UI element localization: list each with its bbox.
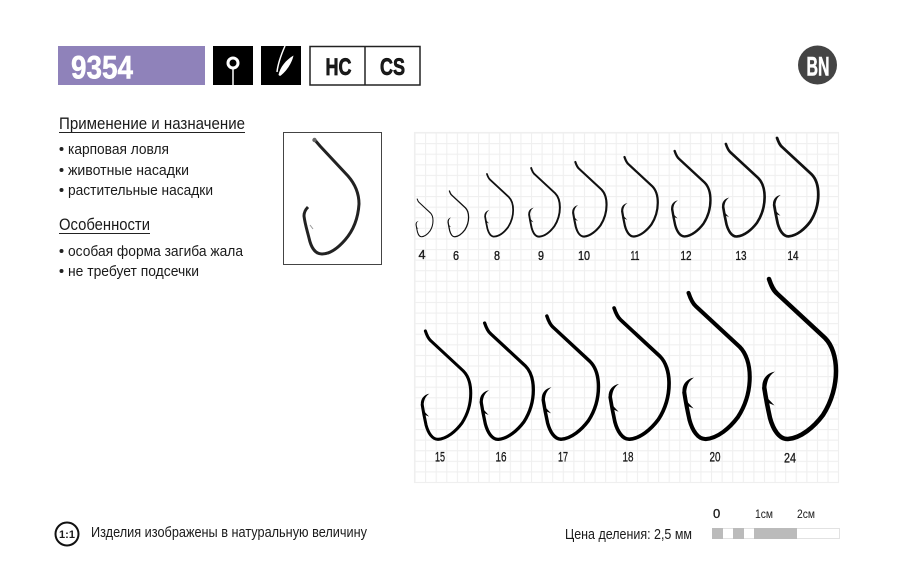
- size labels: row one: 10: [578, 249, 590, 263]
- list: application: растительные насадки: [68, 182, 213, 199]
- size labels: row two: 17: [558, 450, 568, 464]
- list: features: [60, 243, 244, 280]
- hooks: row one: [416, 138, 818, 237]
- size labels: row two: 20: [710, 450, 720, 464]
- size labels: row one: 8: [494, 249, 500, 263]
- panel: size chart grid: [414, 132, 838, 482]
- hooks: row two: [421, 279, 836, 439]
- size labels: row one: 6: [453, 249, 459, 263]
- list: application: карповая ловля: [68, 141, 169, 158]
- size labels: row one: 9: [538, 249, 544, 263]
- icon: point: [261, 46, 301, 85]
- list: features: особая форма загиба жала: [68, 243, 244, 260]
- heading: application: Применение и назначение: [59, 114, 245, 133]
- panel: hook photo: [284, 132, 382, 264]
- size labels: row two: 15: [435, 450, 445, 464]
- size labels: row one: 4: [418, 248, 426, 262]
- size labels: row two: 24: [784, 450, 796, 466]
- badge: HC CS: [310, 46, 420, 85]
- list: features: не требует подсечки: [68, 263, 199, 280]
- icon: scale 1:1: 1:1: [59, 529, 75, 541]
- heading: features: Особенности: [59, 215, 150, 234]
- list: application: [60, 141, 213, 199]
- badge: HC CS: HC: [326, 54, 352, 81]
- note: natural size: Изделия изображены в натуральную величину: [91, 525, 368, 541]
- size labels: row one: 14: [788, 249, 799, 263]
- icon: scale 1:1: [56, 522, 78, 546]
- size labels: row two: 16: [496, 450, 506, 464]
- scale bar: [712, 506, 840, 539]
- note: division value: Цена деления: 2,5 мм: [565, 526, 692, 543]
- badge: model number: [58, 46, 205, 86]
- icon: ring eye: [213, 46, 253, 85]
- badge: model number: 9354: [71, 50, 133, 86]
- scale bar: 0: [713, 506, 720, 521]
- size labels: row one: 12: [680, 249, 692, 263]
- badge: BN: BN: [806, 52, 830, 82]
- size labels: row two: 18: [622, 450, 634, 464]
- size labels: row two: [435, 450, 796, 466]
- badge: BN: [798, 46, 837, 84]
- size labels: row one: 11: [630, 249, 640, 263]
- scale bar: 1см: [755, 507, 773, 521]
- size labels: row one: 13: [736, 249, 747, 263]
- scale bar: 2см: [797, 507, 815, 521]
- badge: HC CS: CS: [380, 54, 405, 81]
- list: application: животные насадки: [68, 162, 189, 179]
- size labels: row one: [418, 248, 799, 263]
